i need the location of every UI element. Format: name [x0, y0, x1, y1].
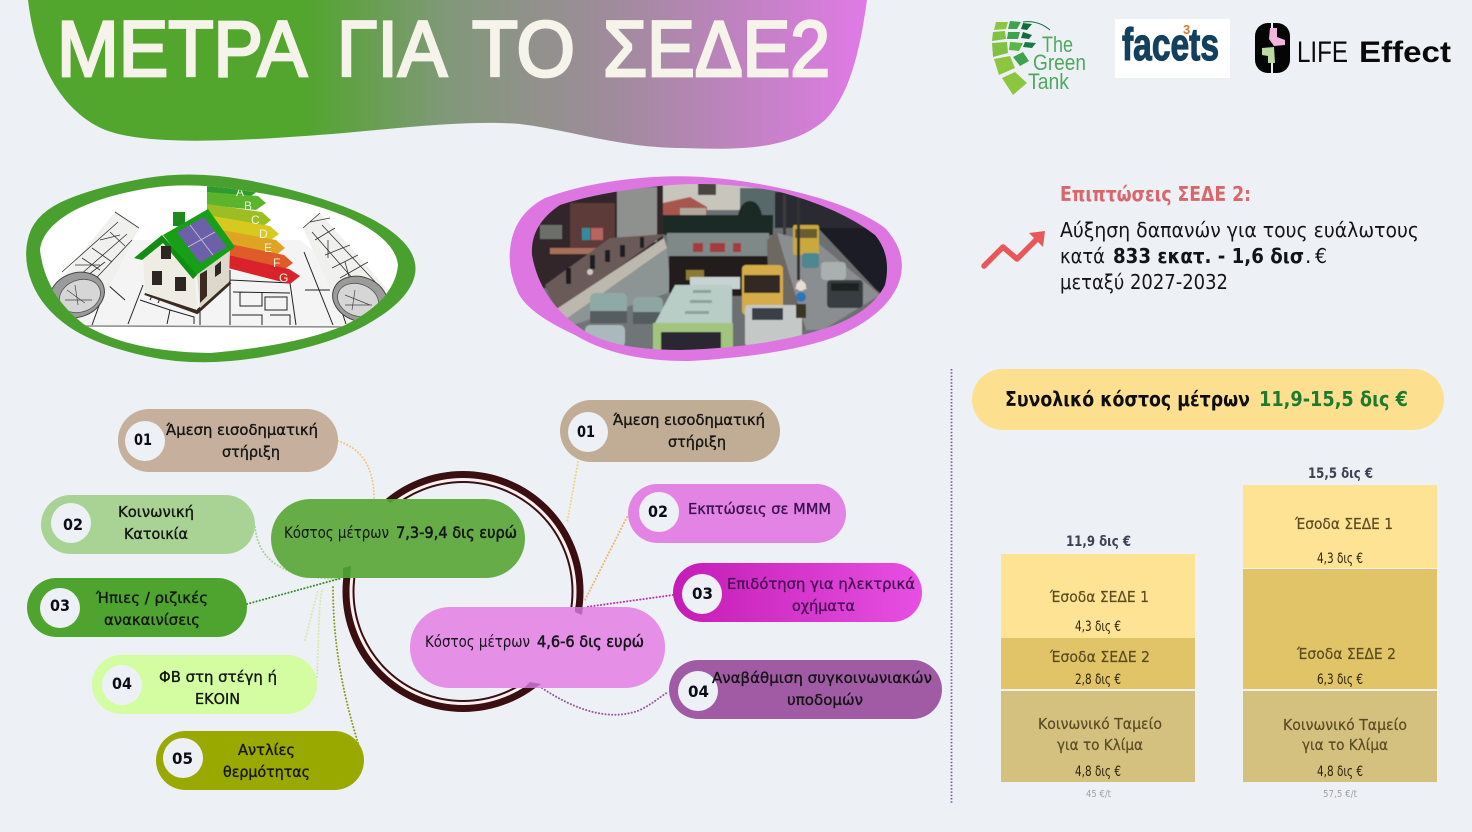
logo: facets3: facets — [1122, 19, 1219, 70]
title text: ΤΟ — [472, 4, 575, 93]
bridge and tunnel — [667, 233, 769, 257]
right pill 04: υποδομών — [787, 691, 863, 709]
photo panel: city traffic — [510, 176, 902, 361]
impact text: 833 εκατ. - 1,6 δισ — [1113, 244, 1304, 268]
right pill 03: Επιδότηση για ηλεκτρικά — [727, 575, 915, 593]
total cost banner — [972, 369, 1444, 430]
logo: facets3: 3 — [1183, 22, 1190, 37]
left pill 03: 03 — [50, 596, 70, 615]
right pill 01: 01 — [577, 422, 595, 441]
impact heading: Επιπτώσεις ΣΕΔΕ 2: — [1060, 182, 1251, 206]
right road — [777, 233, 880, 330]
photo panel: energy-efficient house — [20, 170, 420, 370]
left pill 02 — [41, 495, 255, 554]
blueprint lines — [92, 252, 346, 325]
energy rating bars: F — [273, 256, 280, 270]
right pill 03: 03 — [692, 584, 713, 603]
left building mass — [528, 183, 663, 288]
vertical dotted divider — [950, 369, 952, 803]
logo: The Green Tank: Green — [1033, 50, 1086, 75]
right pill 03 — [673, 563, 922, 622]
total cost banner: 11,9-15,5 δις € — [1259, 387, 1408, 411]
right pill 02: 02 — [648, 502, 668, 521]
total cost banner: Συνολικό κόστος μέτρων — [1005, 387, 1250, 411]
right pill 02: Εκπτώσεις σε ΜΜΜ — [688, 500, 831, 518]
title text — [57, 4, 830, 93]
logo: LIFE Effect — [1255, 23, 1451, 73]
left pill 04: ΦΒ στη στέγη ή — [159, 668, 277, 686]
impact note: ΣΕΔΕ 2 — [984, 182, 1419, 294]
right pill 01 — [560, 400, 780, 462]
impact text: κατά — [1060, 244, 1105, 268]
banner blob — [28, 0, 867, 149]
bar: 45 €/t scenario: 11,9 δις € — [1066, 534, 1131, 550]
title banner — [28, 0, 867, 149]
left pill 03: ανακαινίσεις — [104, 611, 200, 629]
title text: ΣΕΔΕ2 — [603, 4, 830, 93]
left pill 01 — [118, 409, 338, 472]
right pill 03: οχήματα — [792, 597, 855, 615]
bar: 57,5 €/t scenario: για το Κλίμα — [1302, 736, 1388, 754]
road signs — [796, 224, 800, 280]
energy rating bars: D — [259, 227, 268, 241]
bar: 45 €/t scenario: Έσοδα ΣΕΔΕ 1 — [1049, 588, 1149, 606]
logo: LIFE Effect: Effect — [1359, 36, 1451, 69]
energy rating bars: A — [236, 185, 244, 199]
bar: 57,5 €/t scenario: Έσοδα ΣΕΔΕ 1 — [1294, 515, 1393, 533]
dotted connectors — [247, 441, 673, 743]
title text: ΓΙΑ — [337, 4, 447, 93]
left pill 02: 02 — [63, 515, 83, 534]
bar: 57,5 €/t scenario: 15,5 δις € — [1308, 466, 1373, 482]
left pill 01: 01 — [134, 430, 152, 449]
sky and far buildings — [662, 184, 761, 211]
logo: facets3 — [1115, 19, 1230, 78]
left pill 01: Άμεση εισοδηματική — [166, 421, 318, 439]
hub pill: green measures cost: 7,3-9,4 δις ευρώ — [396, 523, 517, 542]
green bus — [690, 277, 740, 289]
right pill 02 — [628, 484, 846, 543]
right pill 01: στήριξη — [668, 433, 726, 451]
bar: 45 €/t scenario: 4,3 δις € — [1075, 619, 1121, 635]
energy rating bars: C — [251, 213, 260, 227]
stacked bar chart — [1001, 466, 1437, 800]
impact text: Αύξηση δαπανών για τους ευάλωτους — [1060, 218, 1419, 242]
rolled blueprint left — [52, 212, 138, 292]
right buildings and crowd — [774, 192, 866, 229]
hub pill: green measures cost: Κόστος μέτρων — [284, 523, 389, 542]
rolled blueprint right — [303, 214, 388, 292]
bar: 45 €/t scenario: 4,8 δις € — [1075, 764, 1121, 780]
left pill 05: Αντλίες — [238, 741, 295, 759]
left pill 05: 05 — [172, 749, 193, 768]
left pill 03 — [27, 578, 247, 637]
bar: 45 €/t scenario — [1001, 534, 1195, 800]
energy rating bars: E — [264, 241, 272, 255]
logo: The Green Tank: Tank — [1028, 69, 1070, 94]
left pill 05: θερμότητας — [223, 763, 310, 781]
impact text — [1060, 218, 1419, 294]
left pill 02: Κατοικία — [124, 525, 188, 543]
bar: 57,5 €/t scenario: Έσοδα ΣΕΔΕ 2 — [1296, 645, 1396, 663]
right pill 04: Αναβάθμιση συγκοινωνιακών — [712, 669, 932, 687]
hub pill: purple measures cost — [410, 607, 665, 688]
hub pill: purple measures cost: 4,6-6 δις ευρώ — [537, 632, 644, 651]
white pickup — [745, 305, 802, 346]
bar: 57,5 €/t scenario: 6,3 δις € — [1317, 672, 1363, 688]
bar: 45 €/t scenario: Έσοδα ΣΕΔΕ 2 — [1049, 648, 1150, 666]
house — [145, 282, 230, 312]
logo: The Green Tank: The — [1042, 32, 1073, 57]
left pill 02: Κοινωνική — [118, 503, 194, 521]
energy rating bars: G — [279, 271, 288, 285]
impact text: € — [1315, 244, 1327, 268]
impact text: . — [1305, 244, 1311, 268]
energy rating bars: B — [244, 199, 252, 213]
bar: 45 €/t scenario: 2,8 δις € — [1075, 672, 1121, 688]
bar: 57,5 €/t scenario: 4,3 δις € — [1317, 551, 1363, 567]
left pill 05 — [156, 731, 364, 790]
left pill 03: Ήπιες / ριζικές — [95, 589, 208, 607]
bar: 45 €/t scenario: 45 €/t — [1086, 789, 1111, 800]
bar: 57,5 €/t scenario: Κοινωνικό Ταμείο — [1283, 716, 1407, 734]
hub pill: purple measures cost: Κόστος μέτρων — [425, 632, 530, 651]
hub pill: green measures cost — [271, 499, 525, 578]
yellow bus — [742, 265, 783, 315]
vehicles — [793, 225, 819, 255]
left pill 04: 04 — [112, 674, 132, 693]
central double ring — [346, 474, 580, 708]
icon: rising trend arrow — [984, 231, 1045, 266]
logo: LIFE Effect: LIFE — [1297, 36, 1348, 69]
logo: The Green Tank — [992, 21, 1086, 95]
energy rating bars — [207, 185, 300, 285]
bar: 57,5 €/t scenario: 57,5 €/t — [1323, 789, 1357, 800]
bar: 45 €/t scenario: Κοινωνικό Ταμείο — [1038, 715, 1162, 733]
left pill 04 — [92, 655, 317, 714]
right pill 01: Άμεση εισοδηματική — [613, 411, 765, 429]
blurred cars — [590, 292, 628, 312]
bar: 57,5 €/t scenario — [1243, 466, 1437, 800]
left pill 01: στήριξη — [222, 443, 280, 461]
bar: 45 €/t scenario: για το Κλίμα — [1057, 736, 1143, 754]
bar: 57,5 €/t scenario: 4,8 δις € — [1317, 764, 1363, 780]
right pill 04 — [669, 660, 942, 719]
impact text: μεταξύ 2027-2032 — [1060, 270, 1228, 294]
right pill 04: 04 — [688, 682, 709, 701]
title text: ΜΕΤΡΑ — [57, 4, 307, 93]
left pill 04: ΕΚΟΙΝ — [195, 690, 240, 708]
left sidewalk and railing — [545, 234, 665, 312]
left road — [575, 292, 671, 328]
